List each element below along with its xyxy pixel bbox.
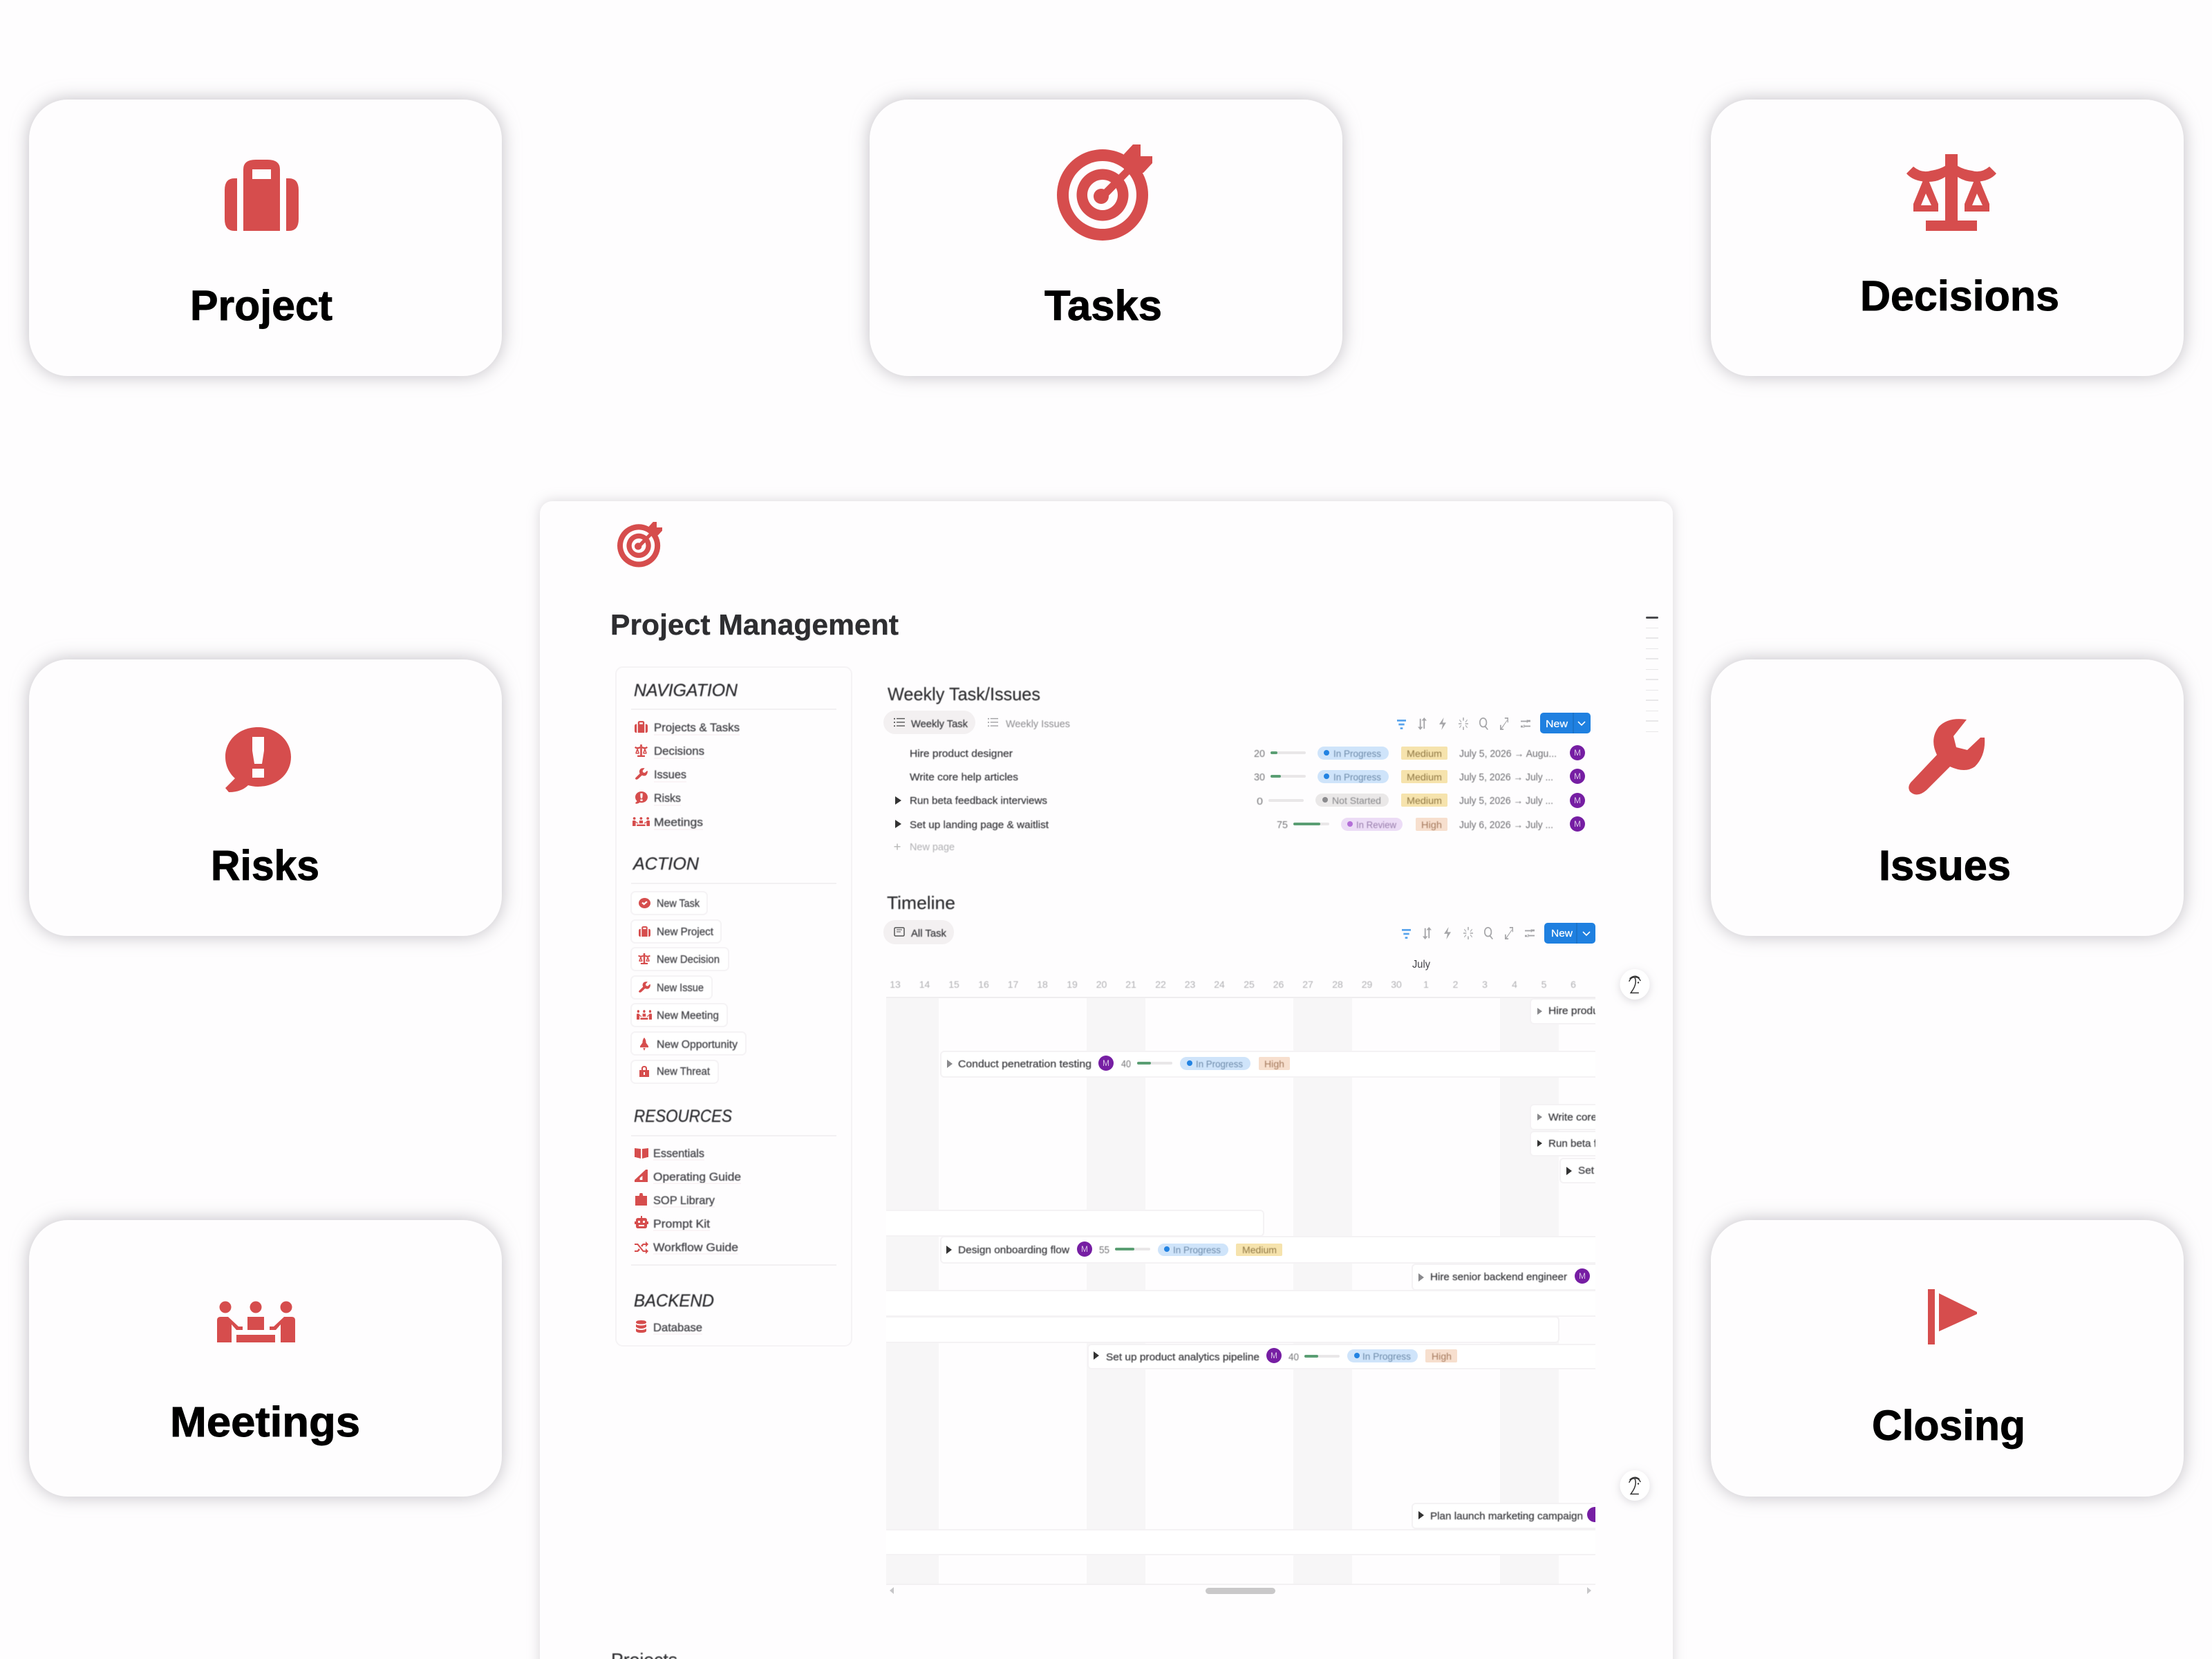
- row: write core help articles: Medium: [1407, 772, 1442, 782]
- tab: all task: [883, 920, 954, 944]
- bar: unlabeled task one: [872, 1210, 1264, 1236]
- bar: hire senior backend engineer: M: [1579, 1271, 1586, 1281]
- row: hire product designer: Medium: [1407, 749, 1442, 759]
- bar: design onboarding flow: In Progress: [1173, 1245, 1221, 1255]
- row: set up landing page and waitlist: M: [1574, 819, 1581, 829]
- navigation links: Projects & Tasks: [654, 721, 740, 734]
- row: set up landing page and waitlist: High: [1421, 820, 1442, 830]
- timeline day numbers: 29: [1362, 979, 1372, 990]
- resource links: [635, 1147, 741, 1254]
- bar: conduct penetration testing: Conduct penetration testing: [958, 1058, 1091, 1070]
- bar: conduct penetration testing: 40: [1121, 1059, 1131, 1070]
- action buttons: New Task: [657, 898, 700, 910]
- timeline day numbers: 6: [1571, 979, 1576, 990]
- timeline day numbers: 22: [1155, 979, 1166, 990]
- row: write core help articles: 30: [1254, 772, 1265, 783]
- action buttons: New Opportunity: [657, 1039, 738, 1051]
- row: run beta feedback interviews: 0: [1257, 796, 1263, 807]
- row: run beta feedback interviews: [895, 793, 1585, 808]
- row: run beta feedback interviews: Medium: [1407, 796, 1442, 806]
- row: hire product designer: 20: [1254, 749, 1265, 760]
- row: hire product designer: July 5, 2026 → Augu...: [1459, 749, 1557, 760]
- card: Risks: [29, 659, 502, 936]
- bar: run beta feedback interviews: Run beta feedback interviews: [1548, 1138, 1686, 1150]
- row: write core help articles: July 5, 2026 → July ...: [1459, 772, 1553, 783]
- label: Risks: Risks: [211, 842, 319, 889]
- action buttons: New Issue: [657, 982, 704, 994]
- action buttons: New Project: [657, 926, 714, 938]
- horizontal scrollbar: [890, 1587, 1591, 1594]
- bar: conduct penetration testing: In Progress: [1196, 1059, 1243, 1069]
- row: write core help articles: In Progress: [1333, 772, 1381, 782]
- icon: wrench: [1909, 719, 1985, 795]
- timeline day numbers: [890, 979, 1576, 990]
- navigation links: Meetings: [654, 816, 703, 829]
- resource links: Workflow Guide: [653, 1241, 738, 1254]
- timeline day numbers: 17: [1008, 979, 1018, 990]
- bar: hire product designer: Hire product designer: [1548, 1005, 1651, 1017]
- heading: weekly task/issues: Weekly Task/Issues: [888, 684, 1040, 704]
- row: write core help articles: M: [1574, 771, 1581, 781]
- bar: design onboarding flow: Medium: [1242, 1245, 1277, 1255]
- row: new page: New page: [910, 841, 955, 853]
- heading: navigation: NAVIGATION: [634, 681, 738, 700]
- action buttons: New Threat: [657, 1066, 711, 1078]
- timeline day numbers: 1: [1423, 979, 1429, 990]
- bar: set up product analytics pipeline: 40: [1288, 1352, 1299, 1363]
- icon: meeting people: [217, 1301, 295, 1342]
- bar: plan launch marketing campaign: [1412, 1503, 1613, 1528]
- heading: action: ACTION: [632, 854, 700, 874]
- bar: set up landing page: Set up landing page & waitlist: [1578, 1165, 1718, 1177]
- bar: set up product analytics pipeline: High: [1432, 1351, 1452, 1362]
- bar: set up landing page: [1559, 1158, 1595, 1183]
- icon: page logo target: [617, 522, 662, 568]
- label: Project: Project: [190, 282, 332, 329]
- row: set up landing page and waitlist: In Review: [1356, 820, 1396, 830]
- bar: unlabeled task two: [872, 1317, 1559, 1342]
- timeline day numbers: 30: [1391, 979, 1402, 990]
- resource links: Essentials: [653, 1147, 704, 1160]
- timeline day numbers: 28: [1332, 979, 1343, 990]
- timeline day numbers: 19: [1067, 979, 1078, 990]
- tabs: weekly views: [883, 711, 1070, 734]
- row: set up landing page and waitlist: [895, 816, 1585, 832]
- label: Closing: Closing: [1872, 1402, 2025, 1449]
- row: set up landing page and waitlist: Set up landing page & waitlist: [910, 819, 1049, 831]
- timeline month: July: July: [1412, 959, 1430, 971]
- bar: conduct penetration testing: [941, 1051, 1618, 1077]
- toolbar: weekly table: New: [1546, 718, 1568, 730]
- timeline day numbers: 14: [919, 979, 930, 990]
- action buttons: New Decision: [657, 954, 720, 966]
- icon: scales: [1906, 154, 1996, 231]
- timeline day numbers: 4: [1512, 979, 1517, 990]
- heading: backend: BACKEND: [634, 1291, 714, 1311]
- bar: conduct penetration testing: High: [1264, 1059, 1284, 1069]
- timeline day numbers: 13: [890, 979, 901, 990]
- timeline day numbers: 23: [1185, 979, 1195, 990]
- icon: target: [1057, 144, 1152, 241]
- bar: set up product analytics pipeline: [1088, 1344, 1620, 1369]
- timeline chart: [886, 997, 1595, 1584]
- icon: flag: [1928, 1289, 1977, 1344]
- bar: design onboarding flow: M: [1081, 1244, 1088, 1254]
- timeline day numbers: 24: [1214, 979, 1225, 990]
- timeline day numbers: 3: [1482, 979, 1488, 990]
- bar: write core help articles: Write core help articles: [1548, 1112, 1657, 1123]
- heading: timeline: Timeline: [887, 892, 955, 913]
- tabs: weekly views: Weekly Task: [911, 718, 968, 730]
- timeline day numbers: 21: [1125, 979, 1136, 990]
- row: write core help articles: Write core help articles: [910, 771, 1018, 783]
- label: Tasks: Tasks: [1044, 282, 1162, 329]
- icon: briefcase: [225, 160, 299, 231]
- bar: plan launch marketing campaign: Plan launch marketing campaign: [1430, 1510, 1583, 1522]
- table: weekly tasks: [894, 745, 1585, 853]
- page title: Project Management: [610, 608, 899, 641]
- card: Issues: [1711, 659, 2184, 936]
- tabs: weekly views: Weekly Issues: [1006, 718, 1070, 730]
- floating button: lower: [1620, 1470, 1649, 1501]
- timeline day numbers: 25: [1244, 979, 1255, 990]
- bar: conduct penetration testing: M: [1103, 1058, 1109, 1068]
- card: Tasks: [870, 100, 1342, 376]
- row: run beta feedback interviews: Not Started: [1332, 796, 1381, 806]
- bar: write core help articles: [1531, 1104, 1595, 1130]
- toolbar: timeline: New: [1551, 928, 1573, 939]
- label: Issues: Issues: [1879, 842, 2011, 889]
- timeline day numbers: 20: [1096, 979, 1107, 990]
- backend link: database: [636, 1320, 702, 1334]
- row: set up landing page and waitlist: July 6, 2026 → July ...: [1459, 820, 1553, 831]
- toolbar: timeline: [1402, 923, 1595, 944]
- heading: resources: RESOURCES: [634, 1107, 732, 1126]
- row: run beta feedback interviews: Run beta feedback interviews: [910, 795, 1047, 807]
- bar: design onboarding flow: 55: [1099, 1245, 1109, 1256]
- timeline day numbers: 16: [978, 979, 989, 990]
- row: write core help articles: [910, 769, 1585, 784]
- bar: hire product designer: [1531, 998, 1595, 1024]
- icon: alert bubble: [225, 727, 291, 792]
- bar: set up product analytics pipeline: In Progress: [1362, 1351, 1411, 1362]
- empty row bands: [878, 1291, 1611, 1555]
- timeline day numbers: 15: [948, 979, 959, 990]
- page outline minimap: [1646, 617, 1658, 732]
- row: hire product designer: [910, 745, 1585, 760]
- timeline day numbers: 5: [1541, 979, 1547, 990]
- row: hire product designer: In Progress: [1333, 749, 1381, 759]
- row: hire product designer: Hire product designer: [910, 748, 1013, 760]
- navigation links: Issues: [654, 768, 686, 781]
- timeline day numbers: 2: [1453, 979, 1459, 990]
- row: set up landing page and waitlist: 75: [1277, 820, 1288, 831]
- label: Decisions: Decisions: [1860, 272, 2059, 319]
- tab: all task: All Task: [911, 928, 946, 939]
- timeline day numbers: 26: [1273, 979, 1284, 990]
- resource links: SOP Library: [653, 1194, 715, 1207]
- row: hire product designer: M: [1574, 748, 1581, 758]
- row: run beta feedback interviews: M: [1574, 796, 1581, 805]
- action buttons: [631, 892, 746, 1083]
- bar: design onboarding flow: [941, 1237, 1618, 1263]
- resource links: Prompt Kit: [653, 1217, 710, 1230]
- resource links: Operating Guide: [653, 1170, 741, 1183]
- bar: run beta feedback interviews: [1531, 1131, 1595, 1156]
- panel: sidebar: [616, 667, 852, 1346]
- bar: design onboarding flow: Design onboarding flow: [958, 1244, 1069, 1256]
- floating button: upper: [1620, 969, 1649, 1000]
- bar: hire senior backend engineer: Hire senior backend engineer: [1430, 1271, 1567, 1283]
- card: Closing: [1711, 1220, 2184, 1497]
- backend link: database: Database: [653, 1321, 702, 1334]
- row: run beta feedback interviews: July 5, 2026 → July ...: [1459, 796, 1553, 807]
- panel: project management screenshot: [540, 501, 1718, 1659]
- timeline day numbers: 18: [1037, 979, 1048, 990]
- toolbar: weekly table: [1397, 713, 1591, 733]
- bar: set up product analytics pipeline: M: [1271, 1351, 1277, 1360]
- navigation links: Risks: [654, 791, 681, 805]
- card: Meetings: [29, 1220, 502, 1497]
- card: Decisions: [1711, 100, 2184, 376]
- weekend column stripes: [886, 997, 1595, 1584]
- action buttons: New Meeting: [657, 1010, 719, 1022]
- card: Project: [29, 100, 502, 376]
- navigation links: Decisions: [654, 744, 704, 758]
- timeline day numbers: 27: [1302, 979, 1313, 990]
- label: Meetings: Meetings: [170, 1398, 360, 1445]
- navigation links: [632, 721, 740, 830]
- bar: hire senior backend engineer: [1412, 1264, 1613, 1290]
- bar: set up product analytics pipeline: Set up product analytics pipeline: [1106, 1351, 1259, 1363]
